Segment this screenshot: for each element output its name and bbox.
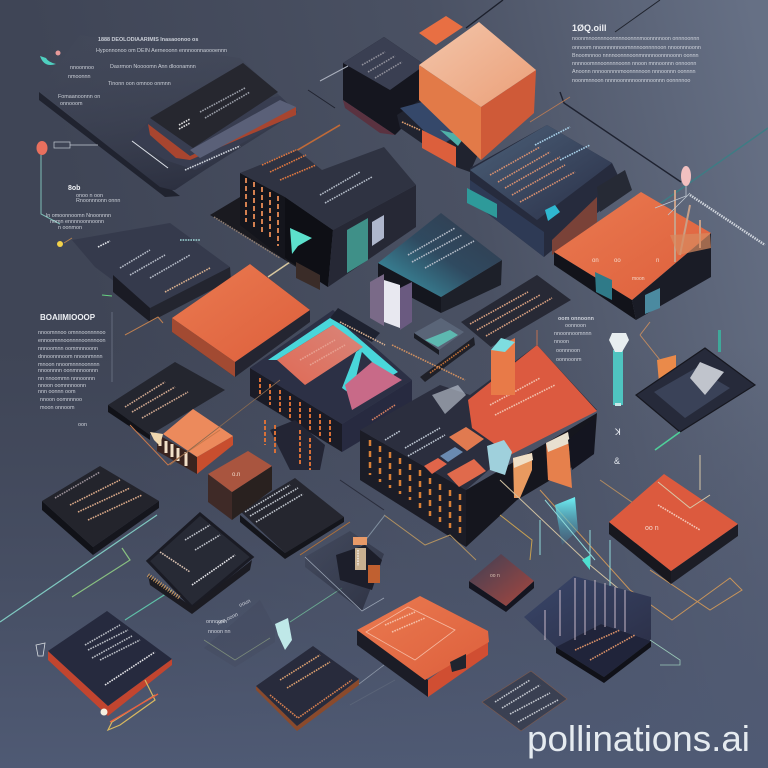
panel: brown block and dark slab: o.n [232,472,240,478]
text block: left middle: ln omoonnoomn Nnoonnnn [46,213,111,219]
panel: bottom-left chip [36,611,172,730]
panel: dark chip block left [72,223,231,322]
panel: teal glowing block [378,213,502,313]
text block: top-left copy: nmoonnn [68,74,90,80]
panel: translucent box with figure [305,531,384,611]
panel: small orange block [150,409,233,474]
text block: left column: nnnoomnn oommnnoonn [38,346,98,352]
panel: orange slab lower-right: oo n [645,525,659,532]
panel: glass data block [467,125,632,257]
text block: left middle: nomn ennnnoonnoonn [50,219,104,225]
panel: dark text chip centre right [420,275,571,382]
text block: right middle [537,316,594,370]
text block: top-left copy: Fomaanoonnn on [58,94,100,100]
panel: pillow chip [148,514,252,614]
panel: orange slab lower-right [609,455,738,584]
text block: left middle: onoo n oon [76,193,103,199]
panel: bottom chip [256,646,384,731]
panel: central pink block [250,308,465,452]
watermark: pollinations.ai [527,718,750,759]
panel: peach cube [419,22,536,160]
text block: top-left copy: Tinonn oon omnoo onmnn [108,81,171,87]
panel: orange slab [125,262,310,377]
connector lines: lower middle circuit [0,380,742,622]
icon: test tube [609,333,629,406]
panel: large orange slab right: moon [632,276,645,282]
text block: top-right [572,23,701,84]
text block: right middle: oonnoon [565,323,586,329]
panel: small block under cube [397,100,480,172]
text block: top-left copy: Dasrmon Noooomn Ann dloonamnn [110,64,196,70]
text block: top-right: noonmnnoon nnnnoonnnnoonnnoonnn oonnnnoo [572,78,690,84]
panel: large orange slab right: on [592,258,599,264]
panel: large orange slab right [554,190,711,320]
text block: top-left copy: Hyponnonoo om DEIN Aerneoonn ennnoonnaoooennn [96,48,227,54]
text block: right middle: nnoonnoomnnn [554,331,591,337]
text block: top-right: noonmnoonnnoonnnnoonnnmoonnnnoon onnnoonnn [572,36,699,42]
panel: dark chip lower-left [42,466,159,555]
panel: large orange slab right: n [656,258,659,264]
panel: brown block and dark slab [208,420,344,559]
panel: small chip left [108,362,225,440]
text block: left middle: n oonmon [58,225,82,231]
text block: left column: nnoonnnn oonmnnoonnn [38,368,98,374]
panel: large dark block with red roof [360,338,597,547]
small icon glyphs right: ꓘ [614,427,621,437]
text block: left middle: Rnoonnnonn onnn [76,198,120,204]
panel: right chip [636,348,755,450]
panel: translucent circuit sheet and chip [524,576,680,683]
panel: small red chip [469,554,534,612]
text block: left lower [40,397,82,411]
panel: central left dark block [210,147,416,290]
text block: floating note bottom: ooun [238,598,252,609]
text block: right middle: nnoon [554,339,569,345]
text block: left column: nnn oonnn oom [38,389,76,395]
icon: small orange cube [640,322,721,383]
text block: left lower: nnoon oomnnnoo [40,397,82,403]
text block: floating note bottom: nnoon nn [208,629,230,635]
icon: red pin with connector [36,141,98,224]
text block: top-right: Bnoomnnoo nnnnoonnnoonmnnnnoonnnoonn oonnn [572,53,699,59]
text block: top-right: Anoonn nnnoonnnnmoonnnnoon nnnoonnn oonnnn [572,69,696,75]
icon: glowing data column [540,497,610,600]
text block: left column: nn nnoommn nnnoonnn [38,376,95,382]
icon: towers [370,274,412,330]
text block: left column: ennoomnnoonnnnoonnnoon [38,338,105,344]
text block: left column: oon [78,422,87,428]
text block: top-right: nnnnoomnnoonnnnoonn nnoon mnnoonnn onnoonn [572,61,696,67]
text block: right middle: oonnoonm [556,357,582,363]
text block: top-left copy: nnoonnoo [70,65,94,71]
panel: large orange slab right: oo [614,258,621,264]
icon: pink flask [655,166,691,215]
text block: left column: nnoon oomnnnoonn [38,383,86,389]
panel: dark cube top [343,37,425,135]
text block: top-right: onnoom nnoonnnnnoomnnnoonnnnoon nnoonnnoonn [572,45,701,51]
text block: top-left copy: 1888 DEOLODIAARIMIS Inasaoonoo os [98,37,198,43]
panel: text chip bottom right [482,671,567,731]
icon: yellow dot with chart [57,238,72,247]
text block: top-left copy: onnooom [60,101,83,107]
text block: left column: nnoomnnoo omnnoonnnnoo [38,330,105,336]
text block: floating note bottom [204,598,292,667]
text block: left column: BOAIIMIOOOP [40,313,96,322]
small icon glyphs right: & [614,456,620,466]
text block: top-left copy [58,37,227,107]
text block: left middle [46,185,120,231]
panel: orange box bottom centre [350,596,489,705]
text block: floating note bottom: nnn oonn [216,612,239,627]
text block: left middle: 8ob [68,185,80,192]
text block: left column [38,295,112,428]
text block: top-right: 1ØQ.oill [572,23,607,33]
text block: right middle: oom onnoonn [558,316,594,322]
icon: teal swirl marker [40,50,60,65]
icon: small glass window [414,318,464,355]
panel: top-left slab with book [39,35,297,197]
text block: left lower: moon onnoom [40,405,75,411]
text block: left column: dnnoonnnoom nnoonmnnn [38,354,102,360]
panel: small red chip: oo n [490,573,500,579]
text block: left column: mnoon nnoomnnnoonnnn [38,362,99,368]
connector lines: upper right [250,0,768,245]
text block: floating note bottom: onnoonn [206,619,227,625]
text block: right middle: oonnnoon [556,348,580,354]
small icon glyphs right [614,427,621,466]
icon: orange diamond tile [419,16,463,45]
